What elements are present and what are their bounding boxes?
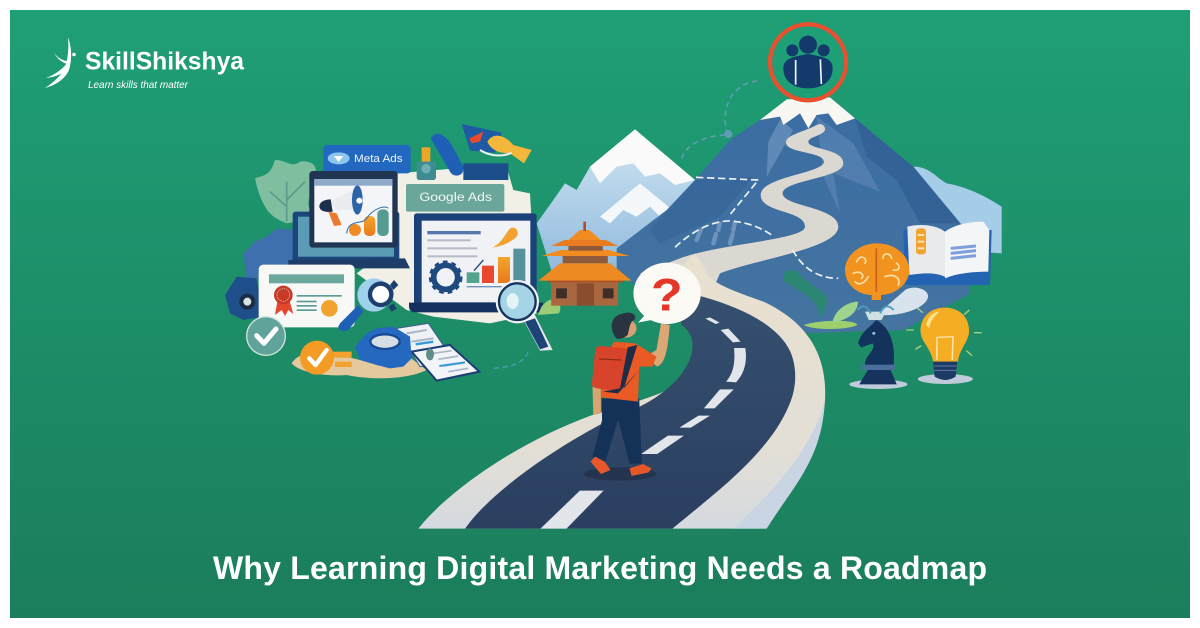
pagoda temple <box>538 222 632 315</box>
mountain shading <box>817 117 880 213</box>
Meta Ads tag <box>323 145 411 173</box>
cream paper backdrop <box>357 167 537 323</box>
left arm <box>592 387 601 415</box>
lower right icons <box>783 270 982 389</box>
tablet with megaphone <box>309 171 398 248</box>
route pin <box>724 130 732 138</box>
icon: community in red ring <box>770 24 846 100</box>
left snowy mountains <box>537 129 695 277</box>
check badge <box>247 317 285 355</box>
gears <box>225 228 295 320</box>
asphalt <box>465 290 795 529</box>
logo: SkillShikshya <box>45 37 245 91</box>
shoes <box>591 457 610 474</box>
certificate card <box>259 265 355 327</box>
documents <box>397 323 479 381</box>
dashed route lines <box>675 177 838 278</box>
blue gear <box>355 327 412 368</box>
question bubble: ? <box>651 271 683 321</box>
marketing tools cluster <box>225 124 553 381</box>
backpack <box>592 346 629 391</box>
blue roller and pen <box>417 134 508 180</box>
leaf <box>255 160 316 223</box>
outer grey edge <box>733 400 825 529</box>
question bubble <box>633 263 701 324</box>
large magnifier <box>496 280 553 351</box>
right laptop with growth chart <box>409 213 543 312</box>
book and brain <box>845 222 992 300</box>
title: Why Learning Digital Marketing Needs a Roadmap <box>213 550 987 586</box>
back laptop <box>288 212 410 268</box>
head <box>615 319 637 338</box>
right pale ridge <box>913 167 1002 253</box>
bulb rays <box>906 308 982 356</box>
snow cap <box>760 97 855 128</box>
shadow <box>584 467 656 481</box>
brand name: SkillShikshya <box>85 48 245 76</box>
Meta Ads tag: Meta Ads <box>354 153 403 165</box>
open book <box>903 222 992 285</box>
brain <box>845 243 909 300</box>
orange shirt <box>601 342 656 402</box>
mountain plant <box>783 270 858 329</box>
chess knight <box>849 320 907 389</box>
legs <box>592 398 642 464</box>
Google Ads tag: Google Ads <box>419 190 492 204</box>
icon: leaping figure <box>45 37 76 88</box>
main road, person, icons <box>418 253 825 529</box>
lane dashes <box>540 317 746 529</box>
winding gravel road <box>640 124 843 303</box>
small magnifier with gear <box>338 278 398 331</box>
main mountain <box>617 100 970 333</box>
raised arm <box>645 323 670 367</box>
sand base <box>292 353 427 378</box>
brain stand <box>857 306 894 320</box>
tagline: Learn skills that matter <box>88 79 188 91</box>
orange check key <box>300 341 352 375</box>
Google Ads tag <box>406 184 504 212</box>
flag and fish shape <box>462 124 532 163</box>
road shoulder <box>418 253 825 529</box>
dashed route swoosh <box>494 352 528 368</box>
light bulb <box>906 308 982 384</box>
cloud under brain <box>878 288 928 315</box>
back mountains and summit <box>537 24 1002 333</box>
person <box>584 313 670 481</box>
